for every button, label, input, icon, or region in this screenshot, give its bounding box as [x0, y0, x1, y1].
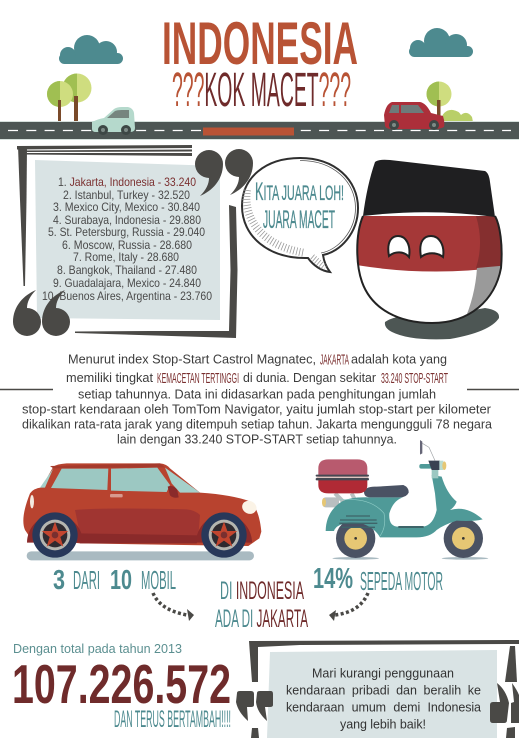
label: 3 dari 10 mobil: DARI [73, 565, 100, 595]
car door details [110, 494, 123, 497]
sketched frame [17, 145, 238, 338]
title: INDONESIA [162, 10, 358, 77]
paragraph: KEMACETAN TERTINGGI [157, 370, 239, 387]
total vehicles [12, 641, 231, 733]
call to action text [286, 666, 481, 732]
panel: city ranking [13, 145, 253, 338]
label: di Indonesia ada di Jakarta: ADA DI JAKARTA [215, 605, 308, 633]
label: 14% sepeda motor [313, 563, 443, 596]
bubble hatching [246, 190, 305, 253]
ranking list: 3. Mexico City, Mexico - 30.840 [53, 201, 200, 214]
ranking list: 9. Guadalajara, Mexico - 24.840 [53, 277, 201, 290]
ranking list: 4. Surabaya, Indonesia - 29.880 [53, 214, 201, 227]
ranking list: 10. Buenos Aires, Argentina - 23.760 [42, 290, 212, 303]
icon: right cloud [409, 28, 473, 57]
mirror [420, 440, 435, 461]
label: 3 dari 10 mobil: 10 [110, 564, 132, 595]
text: DAN TERUS BERTAMBAH!!!! [114, 706, 231, 733]
label: di Indonesia ada di Jakarta: DI INDONESIA [220, 577, 304, 605]
ball outline [357, 216, 502, 323]
paragraph: di dunia. Dengan sekitar [243, 370, 377, 385]
panel: call to action [236, 640, 519, 738]
ranking list: 5. St. Petersburg, Russia - 29.040 [48, 226, 205, 239]
total vehicles: Dengan total pada tahun 2013 [13, 641, 182, 656]
handlebar [419, 461, 446, 478]
ball shadow [385, 308, 499, 339]
call to action text: Mari kurangi penggunaan [312, 666, 454, 680]
ranking list [42, 176, 212, 303]
call to action text: kendaraan pribadi dan beralih ke [286, 684, 481, 698]
paragraph: setiap tahunnya. Data ini didasarkan pada penghitungan jumlah [78, 386, 436, 402]
paragraph: Menurut index Stop-Start Castrol Magnatec, [68, 352, 316, 366]
car windows [51, 469, 108, 490]
title [162, 10, 358, 117]
call to action background [267, 650, 497, 738]
paragraph: adalah kota yang [351, 352, 447, 366]
ranking list: 6. Moscow, Russia - 28.680 [62, 239, 192, 252]
paragraph: stop-start kendaraan oleh TomTom Navigator, yaitu jumlah stop-start per kilometer [22, 402, 492, 416]
icon: teal scooter illustration [316, 440, 488, 560]
rear wheel [27, 512, 83, 558]
label: 3 dari 10 mobil [53, 564, 176, 595]
icon: quote marks left [236, 691, 273, 721]
icon: left trees [47, 74, 92, 123]
paragraph: memiliki tingkat [66, 370, 153, 385]
wheel shadows [332, 557, 488, 560]
ranking panel background [35, 160, 220, 320]
ranking list: 2. Istanbul, Turkey - 32.520 [63, 189, 190, 202]
car body [23, 463, 261, 546]
wheels [336, 519, 483, 558]
road [0, 121, 519, 140]
text: MOBIL [141, 565, 176, 595]
paragraph [22, 352, 493, 446]
bubble text [255, 178, 344, 234]
ball body [358, 216, 501, 322]
icon: red car illustration [23, 463, 261, 560]
speech bubble [242, 158, 358, 272]
ranking list: 1. Jakarta, Indonesia - 33.240 [58, 176, 196, 189]
scooter body [326, 475, 483, 537]
paragraph: JAKARTA [320, 352, 349, 368]
call to action frame [249, 640, 519, 738]
arrow: scooter to centre [329, 593, 368, 621]
ranking list: 8. Bangkok, Thailand - 27.480 [57, 264, 197, 277]
icon: right tree and bushes [426, 82, 473, 123]
car ground shadow [27, 551, 254, 560]
hat [363, 160, 495, 217]
icon: Indonesia countryball [350, 160, 510, 339]
title: ???KOK MACET??? [172, 64, 351, 117]
label: 3 dari 10 mobil: 3 [53, 564, 65, 595]
taillight [322, 497, 339, 507]
icon: quote marks right [490, 683, 519, 723]
ranking list: 7. Rome, Italy - 28.680 [73, 251, 179, 264]
icon: opening quote marks [13, 290, 70, 336]
call to action text: kendaraan umum demi Indonesia [286, 700, 481, 714]
call to action text: yang lebih baik! [340, 718, 426, 732]
bubble text: KITA JUARA LOH! [255, 178, 344, 206]
icon: pale green car [92, 107, 135, 135]
label: 14% sepeda motor: 14% [313, 563, 353, 595]
total vehicles: 107.226.572 [12, 653, 231, 715]
bubble tail hatching [312, 257, 325, 268]
bubble shape [242, 158, 358, 272]
label: di Indonesia ada di Jakarta [215, 577, 308, 633]
front wheel [196, 512, 252, 558]
seat [364, 485, 409, 497]
icon: closing quote marks [195, 149, 253, 196]
bubble inner outline [300, 160, 356, 253]
arrow: car to centre [153, 593, 194, 621]
rack [335, 493, 355, 502]
icon: red car [384, 102, 444, 130]
icon: left cloud [59, 35, 123, 64]
speech bubble: JUARA MACET [263, 206, 335, 234]
paragraph: dikalikan rata-rata jarak yang ditempuh setiap tahun. Jakarta mengungguli 78 negara [22, 416, 493, 432]
paragraph: lain dengan 33.240 STOP-START setiap tahunnya. [117, 432, 397, 446]
luggage box [316, 459, 369, 493]
eyes [388, 236, 443, 257]
